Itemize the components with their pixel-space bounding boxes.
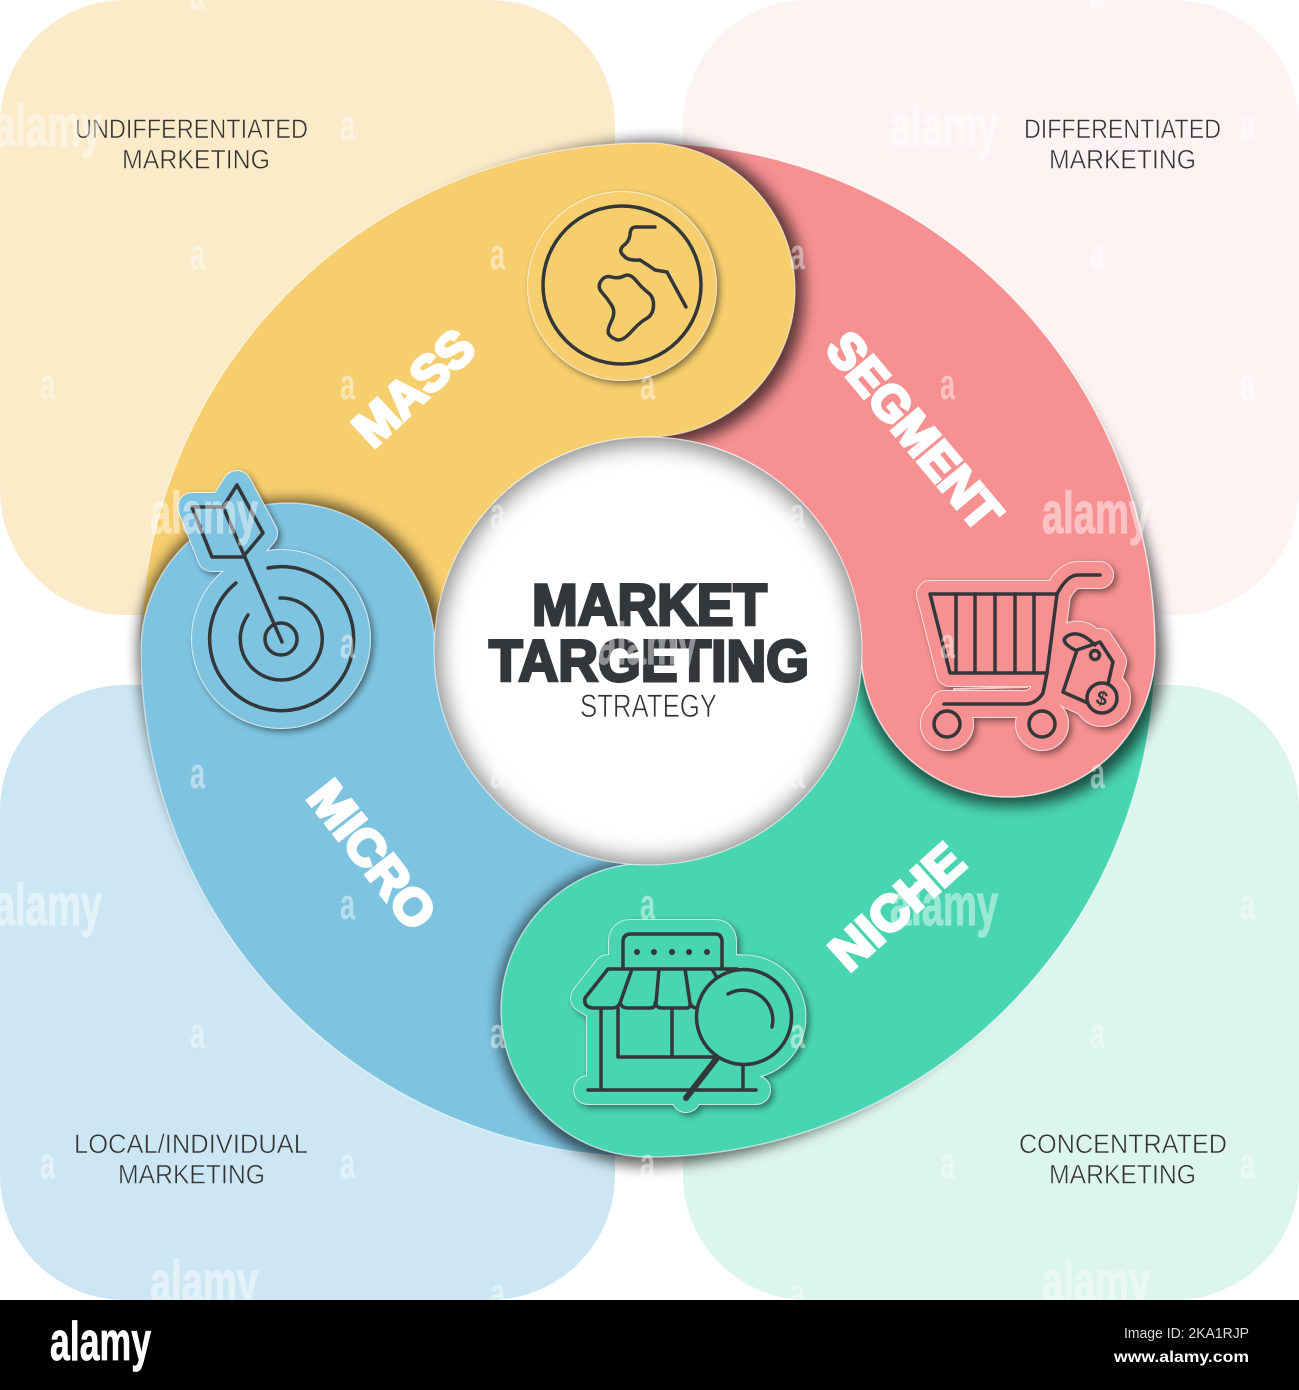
- watermarks: a: [790, 1009, 805, 1058]
- watermarks: a: [640, 880, 655, 929]
- text: differentiated marketing: [1024, 114, 1221, 174]
- icon: shopping cart with price tag: $: [1094, 687, 1110, 711]
- watermarks: alamy: [1042, 481, 1150, 546]
- title: market targeting strategy: [489, 573, 809, 724]
- label: segment: SEGMENT: [815, 321, 1013, 541]
- watermarks: a: [340, 101, 355, 150]
- watermarks: a: [40, 1139, 55, 1188]
- text: concentrated marketing: [1019, 1129, 1227, 1190]
- text: undifferentiated marketing: UNDIFFERENTIATED: [75, 114, 308, 144]
- watermarks: a: [190, 749, 205, 798]
- title: market targeting strategy: TARGETING: [489, 629, 809, 694]
- watermarks: alamy: [150, 481, 258, 546]
- watermarks: a: [190, 1009, 205, 1058]
- watermarks: a: [40, 360, 55, 409]
- segment: micro arm: [141, 503, 648, 1157]
- watermarks: alamy: [890, 94, 998, 159]
- text: concentrated marketing: MARKETING: [1049, 1160, 1196, 1190]
- watermarks: alamy: [597, 612, 697, 677]
- segment: micro head overlap: [140, 490, 442, 680]
- watermarks: a: [1240, 880, 1255, 929]
- watermarks: a: [1090, 749, 1105, 798]
- title: market targeting strategy: MARKET: [532, 573, 767, 638]
- watermarks: a: [790, 489, 805, 538]
- watermarks: a: [1240, 1139, 1255, 1188]
- footer logo: alamy: [50, 1310, 151, 1372]
- watermarks: a: [340, 360, 355, 409]
- watermarks: a: [940, 360, 955, 409]
- panel: local individual marketing background: [0, 685, 615, 1300]
- watermarks: alamy: [1042, 1250, 1150, 1315]
- center circle: [433, 436, 863, 866]
- icon: store with magnifier: [585, 934, 792, 1098]
- segment: segment: [648, 143, 1155, 797]
- watermarks: a: [490, 1009, 505, 1058]
- title: market targeting strategy: STRATEGY: [580, 688, 717, 724]
- watermarks: a: [790, 230, 805, 279]
- watermarks: a: [1240, 101, 1255, 150]
- watermarks: a: [940, 1139, 955, 1188]
- panel: differentiated marketing background: [683, 0, 1299, 615]
- watermarks: alamy: [890, 873, 998, 938]
- text: local individual marketing: [74, 1129, 308, 1190]
- icon: globe: [542, 206, 702, 366]
- watermarks: a: [340, 1139, 355, 1188]
- watermarks: a: [340, 880, 355, 929]
- watermarks: a: [490, 230, 505, 279]
- footer bar: [0, 1300, 1299, 1390]
- panel: concentrated marketing background: [683, 685, 1299, 1300]
- watermarks: a: [940, 619, 955, 668]
- watermarks: a: [1240, 360, 1255, 409]
- segment: niche: [501, 650, 1155, 1157]
- icon: dart and target: [192, 485, 356, 714]
- watermarks: a: [340, 619, 355, 668]
- watermarks: a: [490, 749, 505, 798]
- watermarks: a: [1090, 1009, 1105, 1058]
- watermarks: a: [640, 360, 655, 409]
- label: mass: MASS: [342, 318, 486, 458]
- text: differentiated marketing: DIFFERENTIATED: [1024, 114, 1221, 144]
- panel: undifferentiated marketing background: [0, 0, 615, 615]
- footer image id: Image ID: 2KA1RJP: [1124, 1325, 1249, 1342]
- watermarks: a: [790, 1269, 805, 1318]
- watermarks: a: [1240, 619, 1255, 668]
- footer url: www.alamy.com: [1113, 1349, 1249, 1366]
- text: undifferentiated marketing: [75, 114, 308, 174]
- label: micro: MICRO: [297, 770, 447, 940]
- text: differentiated marketing: MARKETING: [1049, 144, 1196, 174]
- watermarks: a: [640, 1139, 655, 1188]
- watermarks: a: [790, 749, 805, 798]
- watermarks: alamy: [150, 1250, 258, 1315]
- segment: mass: [141, 143, 795, 650]
- watermarks: a: [490, 489, 505, 538]
- watermarks: a: [190, 230, 205, 279]
- text: concentrated marketing: CONCENTRATED: [1019, 1129, 1227, 1159]
- watermarks: a: [490, 1269, 505, 1318]
- watermarks: a: [40, 619, 55, 668]
- label: niche: NICHE: [819, 833, 975, 981]
- text: local individual marketing: LOCAL/INDIVIDUAL: [74, 1129, 308, 1159]
- icon: shopping cart with price tag: [930, 575, 1117, 737]
- watermarks: a: [1090, 230, 1105, 279]
- text: undifferentiated marketing: MARKETING: [122, 144, 270, 174]
- text: local individual marketing: MARKETING: [118, 1160, 265, 1190]
